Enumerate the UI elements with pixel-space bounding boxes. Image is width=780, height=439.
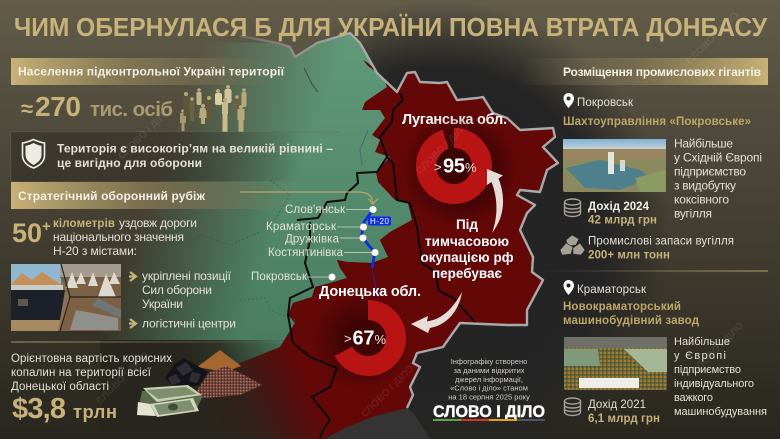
heading bar: defense line <box>11 182 301 209</box>
watermarks: СЛОВО І ДІЛО <box>94 350 151 407</box>
photo: fortifications <box>11 264 121 331</box>
map: city labels: Дружківка <box>285 234 340 246</box>
stat: revenue 2021: 6,1 млрд грн <box>588 413 660 425</box>
text: NKMZ description: у Європі <box>674 350 726 362</box>
map: lower left fade <box>100 340 360 439</box>
text: terrain note: Територія є високогір’ям на великій рівнині – <box>57 142 333 156</box>
icon: coins 2021 <box>564 398 580 416</box>
stat: 3.8 trillion: трлн <box>73 401 117 422</box>
map of Donbas <box>100 32 560 439</box>
heading: industrial giants: Розміщення промислових гігантів <box>563 65 761 79</box>
heading: NKMZ: Новокраматорський <box>563 301 681 313</box>
text: source note <box>448 357 530 402</box>
photo: NKMZ plant <box>564 337 667 390</box>
text: terrain note <box>57 142 333 170</box>
stat: coal reserves: Промислові запаси вугілля <box>588 236 734 248</box>
stat: 50+ km: + <box>42 218 51 235</box>
population figure: тис. осіб <box>90 98 173 121</box>
text: mineral value: Орієнтовна вартість корисних <box>11 353 172 365</box>
text: mineral value: копалин на території всієї <box>11 367 152 379</box>
map: occupied territory <box>170 60 558 439</box>
donut: Luhansk 95% <box>426 138 482 194</box>
text: Pokrovske description: підприємство <box>674 164 746 178</box>
donut: Donetsk 67% <box>340 310 396 366</box>
stat: revenue 2021: Дохід 2021 <box>588 399 646 411</box>
population figure: 270 <box>35 91 81 122</box>
text: Pokrovske description: з видобутку <box>674 178 736 192</box>
text: city Pokrovsk: Покровськ <box>577 97 634 109</box>
panel: mineral value <box>11 342 301 425</box>
arrow: list marker 2 <box>129 319 136 328</box>
icon: coins 2024 <box>564 199 580 216</box>
map: sea of Azov <box>325 408 430 439</box>
stat: 50+ km: 50 <box>12 218 42 248</box>
text: source note: джерел інформації, <box>455 375 523 384</box>
icon: crowd of people <box>180 85 246 132</box>
illustration: minerals and money <box>137 350 262 417</box>
map: highway H-20: Н-20 <box>370 217 390 226</box>
population figure: ≈ <box>21 96 33 121</box>
icon: coal <box>560 235 585 255</box>
text: occupied: тимчасовою <box>425 234 509 249</box>
text: NKMZ description: індивідуального <box>674 378 754 390</box>
text: fortified positions: укріплені позиції <box>142 269 232 283</box>
text: source note: Інфографіку створено <box>451 357 527 366</box>
map: oblast outer border <box>240 33 558 408</box>
population figure <box>21 91 173 122</box>
label: Donetsk oblast: Донецька обл. <box>319 284 421 300</box>
heading: NKMZ <box>563 301 700 327</box>
text: Pokrovske description: коксівного <box>674 192 729 206</box>
donut: Luhansk 95%: % <box>465 160 477 175</box>
text: Pokrovske description <box>674 136 762 220</box>
text: mineral value <box>11 353 172 393</box>
photo: Pokrovske mine <box>563 139 666 192</box>
stat: 50+ km <box>12 216 197 258</box>
stat: revenue 2024 <box>588 201 657 226</box>
map: city labels: Костянтинівка <box>268 247 344 259</box>
map: city labels <box>251 204 378 283</box>
icon: shield <box>22 140 44 168</box>
text: fortified positions <box>142 269 232 311</box>
text: terrain note: це вигідно для оборони <box>57 156 202 170</box>
text: NKMZ description: машинобудування <box>674 406 767 418</box>
map: city labels: Краматорськ <box>266 221 337 233</box>
stat: 50+ km: кілометрів <box>53 218 115 230</box>
text: source note: на 18 серпня 2025 року <box>448 392 530 402</box>
watermarks <box>94 10 746 420</box>
map: highway H-20 <box>362 210 391 300</box>
heading: Pokrovske mine: Шахтоуправління «Покровське» <box>563 116 751 128</box>
donut: Donetsk 67%: 67 <box>352 328 374 350</box>
map: city labels: Покровськ <box>251 271 308 283</box>
text: fortified positions: України <box>142 297 183 311</box>
text: occupied: перебуває <box>432 266 503 281</box>
stat: 50+ km: уздовж дороги <box>119 216 197 230</box>
heading bar: population <box>11 58 276 85</box>
stat: revenue 2021 <box>588 399 660 425</box>
text: Pokrovske description: вугілля <box>674 206 712 220</box>
label: Luhansk oblast: Луганська обл. <box>402 112 507 128</box>
panel: industrial giants <box>520 58 768 425</box>
donut: Luhansk 95%: 95 <box>443 156 465 178</box>
text: NKMZ description: важкого <box>674 392 713 404</box>
watermarks: СЛОВО І ДІЛО <box>359 363 416 420</box>
donut: Donetsk 67%: > <box>344 331 352 346</box>
label: Donetsk oblast <box>312 284 421 390</box>
text: Pokrovske description: у Східній Європі <box>674 150 762 164</box>
stat: 3.8 trillion: $3,8 <box>12 393 66 425</box>
text: occupied: окупацією рф <box>420 250 514 265</box>
label: Luhansk oblast <box>402 112 518 228</box>
stat: coal reserves <box>588 236 734 262</box>
watermarks: СЛОВО І ДІЛО <box>414 120 471 177</box>
panel: terrain note <box>11 132 340 181</box>
text: occupied <box>420 217 514 281</box>
watermarks: СЛОВО І ДІЛО <box>116 105 173 162</box>
heading bar: industrial giants <box>520 58 768 85</box>
arrow: to Luhansk <box>487 169 503 233</box>
stat: revenue 2024: 42 млрд грн <box>588 214 657 226</box>
heading: defense line: Стратегічний оборонний рубіж <box>18 189 205 203</box>
heading: population: Населення підконтрольної Україні території <box>18 64 285 78</box>
stat: 50+ km: Н-20 з містами: <box>53 244 137 258</box>
arrow: list marker 1 <box>129 272 136 281</box>
heading: NKMZ: машинобудівний завод <box>563 315 700 327</box>
icon: pin Kramatorsk <box>564 280 574 295</box>
text: NKMZ description <box>674 336 767 418</box>
donut: Luhansk 95%: > <box>434 160 442 174</box>
panel: population <box>11 58 285 132</box>
text: NKMZ description: підприємство <box>674 364 741 376</box>
map: left fade <box>100 34 336 340</box>
icon: pin Pokrovsk <box>564 93 574 108</box>
text: fortified positions: Сил оборони <box>142 283 212 297</box>
text: mineral value: Донецької області <box>11 381 109 393</box>
watermarks: СЛОВО І ДІЛО <box>684 10 741 67</box>
donut: Donetsk 67%: % <box>374 332 386 347</box>
list: positions <box>129 269 236 330</box>
stat: coal reserves: 200+ млн тонн <box>588 250 670 262</box>
map: contact line <box>288 93 475 439</box>
stat: 3.8 trillion <box>12 393 117 425</box>
arrow: to Sloviansk <box>240 192 378 204</box>
logo: Slovo i Dilo: СЛОВО І ДІЛО <box>433 403 545 421</box>
text: Pokrovske description: Найбільше <box>674 136 733 150</box>
map: city labels: Слов'янськ <box>285 204 346 216</box>
text: occupied: Під <box>456 217 478 232</box>
stat: revenue 2024: Дохід 2024 <box>588 201 650 213</box>
text: source note: за даними відкритих <box>453 366 525 375</box>
text: city Kramatorsk: Краматорськ <box>577 284 647 296</box>
text: source note: «Слово і діло» станом <box>450 384 528 392</box>
panel: strategic defense line <box>11 182 378 331</box>
text: NKMZ description: Найбільше <box>674 336 730 348</box>
watermarks: СЛОВО І ДІЛО <box>689 320 746 377</box>
map: Ukrainian-controlled territory <box>100 33 412 382</box>
stat: 50+ km: національного значення <box>53 230 184 244</box>
map: terrain details <box>190 68 368 320</box>
arrow: to Donetsk <box>411 292 462 333</box>
text: logistics: логістичні центри <box>142 316 236 330</box>
